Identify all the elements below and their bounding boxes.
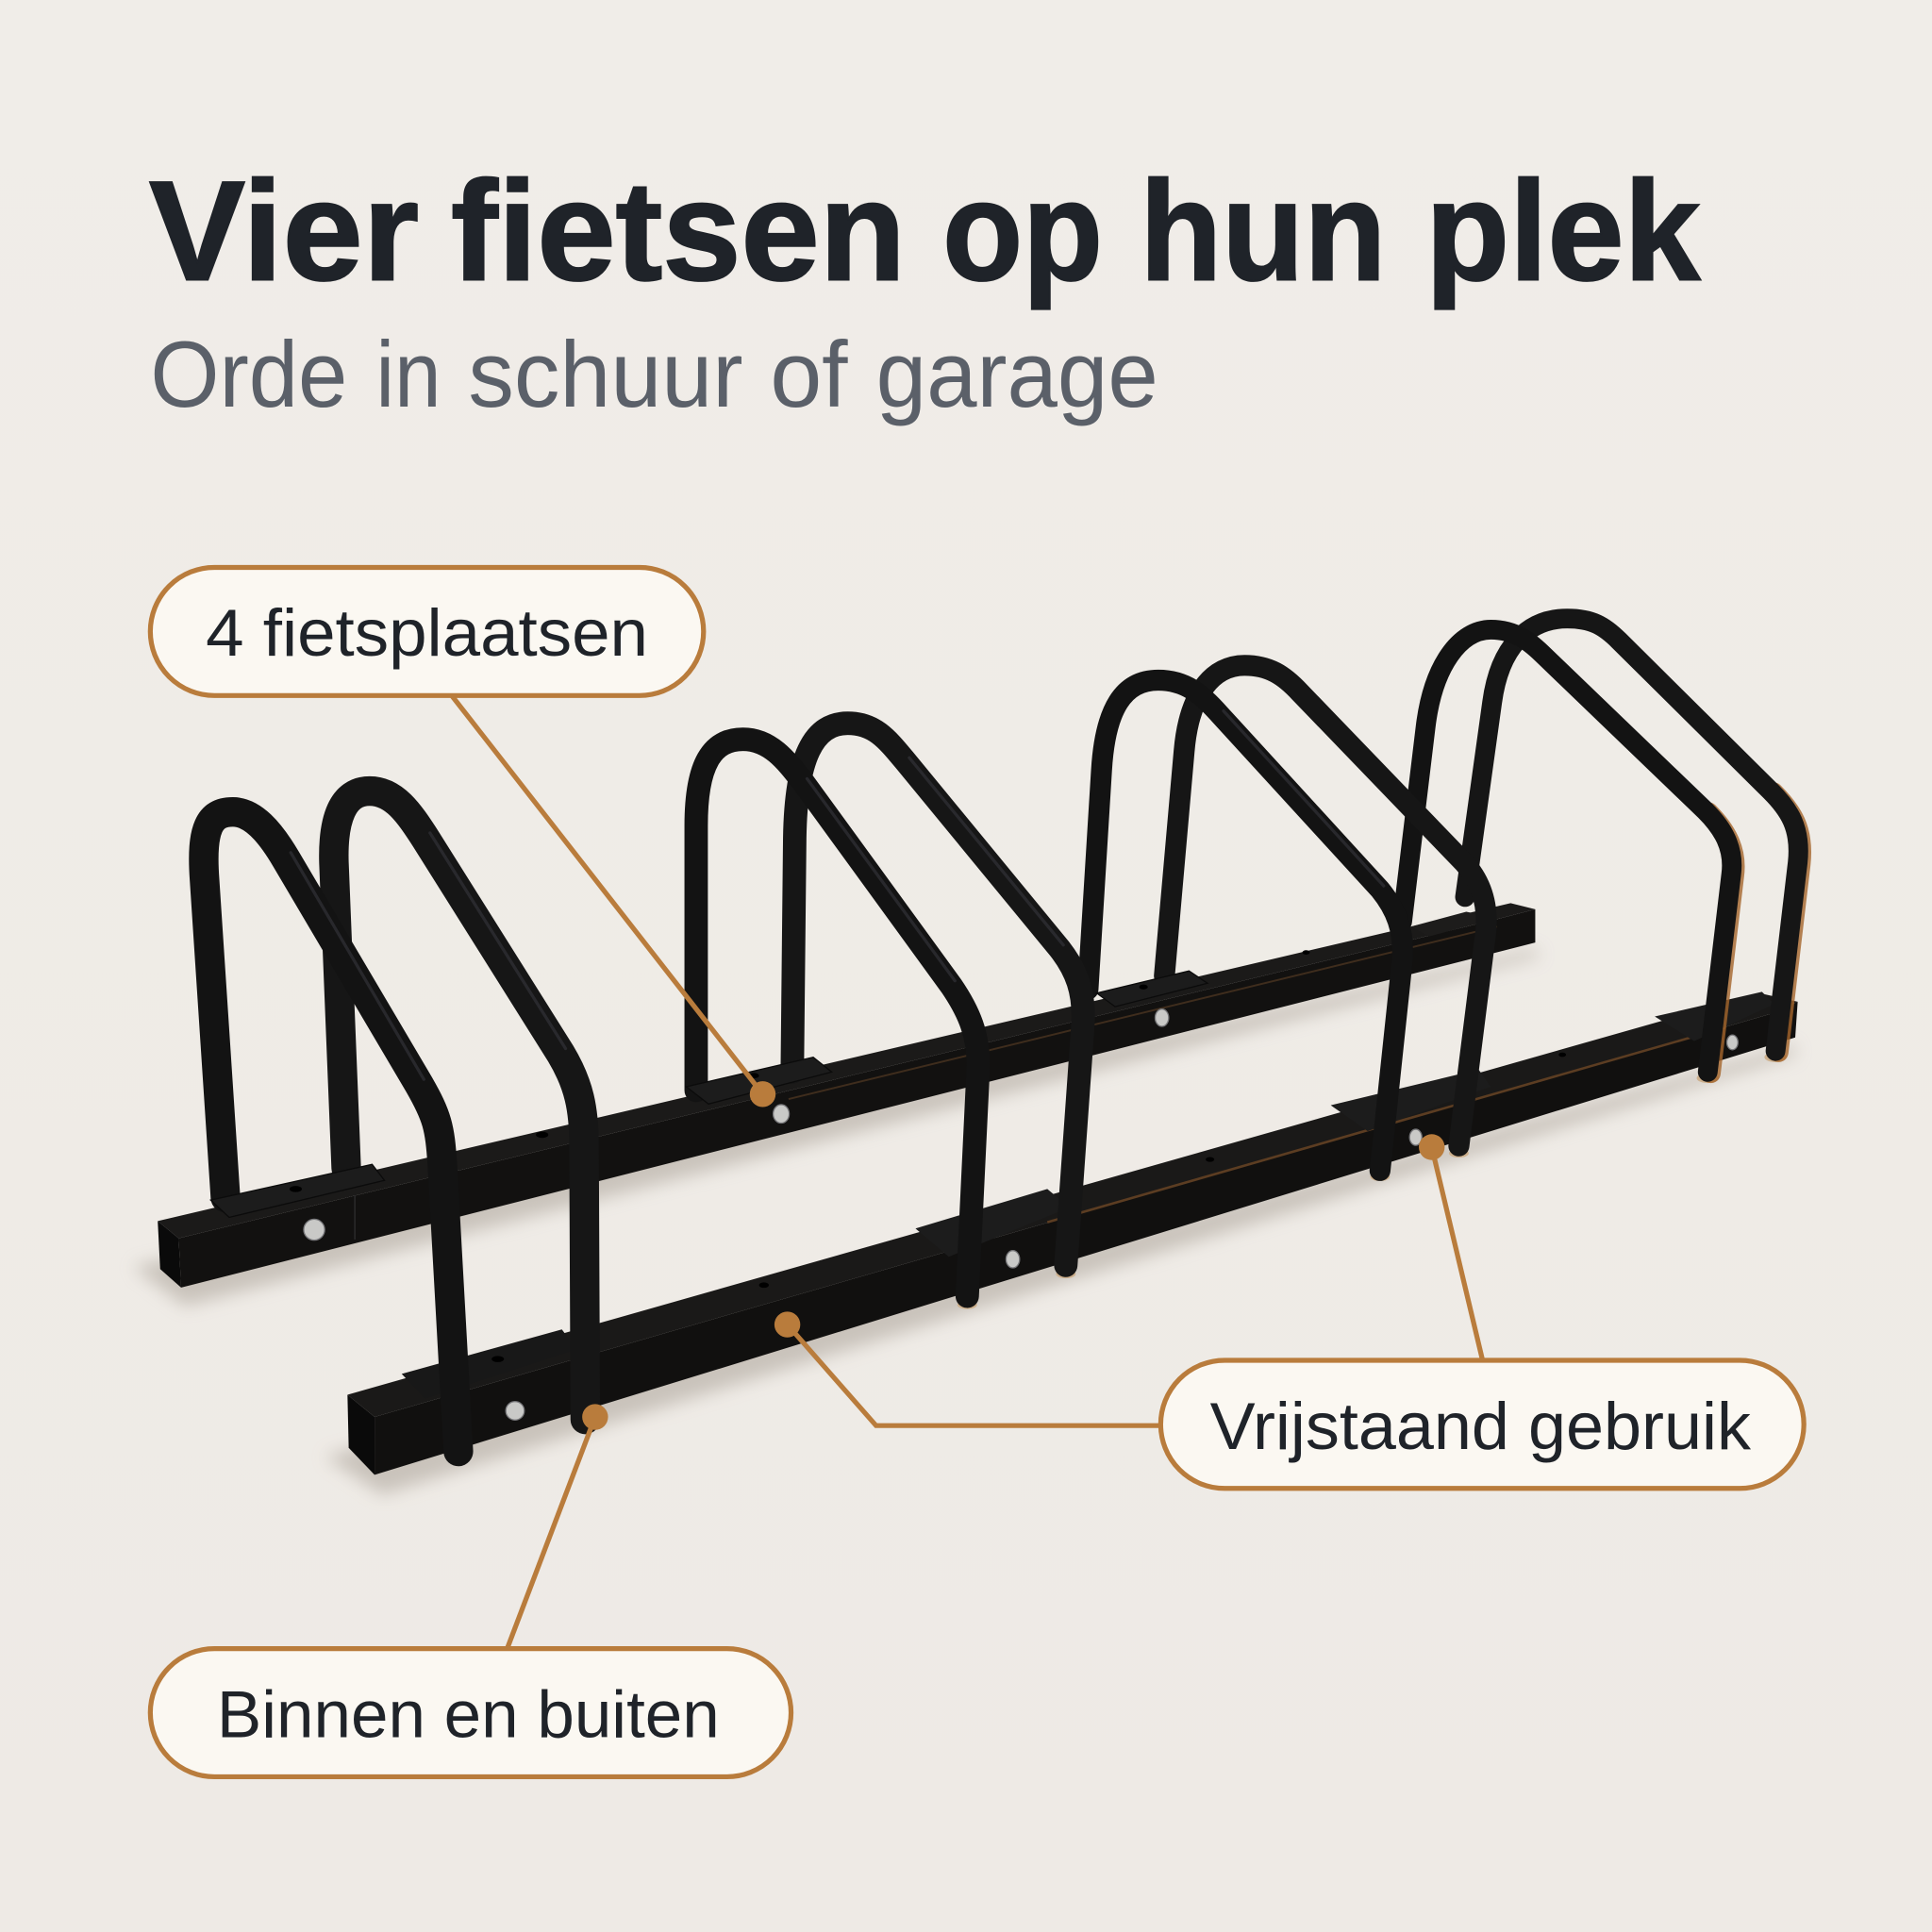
- hoop 2: [334, 791, 585, 1420]
- copper edge reflections: [1708, 792, 1802, 1074]
- hoop 5: [1088, 680, 1403, 1171]
- subtitle: Orde: [150, 323, 347, 427]
- pill: [150, 567, 704, 695]
- label: 4 fietsplaatsen: [206, 595, 648, 670]
- pill: [150, 1649, 791, 1776]
- hoop 6: [1164, 665, 1487, 1146]
- front rail: [347, 991, 1798, 1474]
- callout: Vrijstaand gebruik: [774, 1134, 1804, 1489]
- callout: 4 fietsplaatsen: [150, 567, 775, 1108]
- hoops, far to near: [204, 619, 1802, 1452]
- title: fietsen: [451, 151, 906, 309]
- subtitle: schuur: [468, 323, 743, 427]
- subtitle: of: [770, 323, 848, 427]
- hoop 1: [204, 812, 458, 1452]
- subtitle: [150, 323, 1158, 427]
- product photo: four-bike floor rack: [133, 619, 1802, 1494]
- subtitle: garage: [876, 323, 1158, 427]
- title: Vier: [149, 151, 419, 309]
- back rail mounting plates: [210, 971, 1208, 1217]
- leader line and dot: [508, 1404, 608, 1647]
- leader lines and dots: [774, 1134, 1482, 1425]
- subtitle: in: [375, 323, 441, 427]
- leader line and dot: [452, 696, 775, 1108]
- tube highlights: [291, 711, 1384, 1079]
- pill: [1160, 1360, 1804, 1489]
- plate holes: [290, 985, 1148, 1192]
- hoop 7: [1402, 629, 1732, 1072]
- hoop 4: [792, 724, 1083, 1265]
- label: Binnen en buiten: [217, 1677, 720, 1752]
- callout: Binnen en buiten: [150, 1404, 791, 1776]
- rubber foot tips: [958, 1052, 1787, 1309]
- label: Vrijstaand gebruik: [1210, 1389, 1752, 1463]
- floor shadows: [133, 949, 1796, 1494]
- title: hun: [1140, 151, 1386, 309]
- hoop 8: [1465, 619, 1798, 1051]
- bolts: [304, 1009, 1738, 1420]
- title: [149, 151, 1701, 309]
- back rail: [158, 903, 1535, 1288]
- hoop 3: [696, 740, 978, 1296]
- title: op: [942, 151, 1103, 309]
- title: plek: [1425, 151, 1701, 309]
